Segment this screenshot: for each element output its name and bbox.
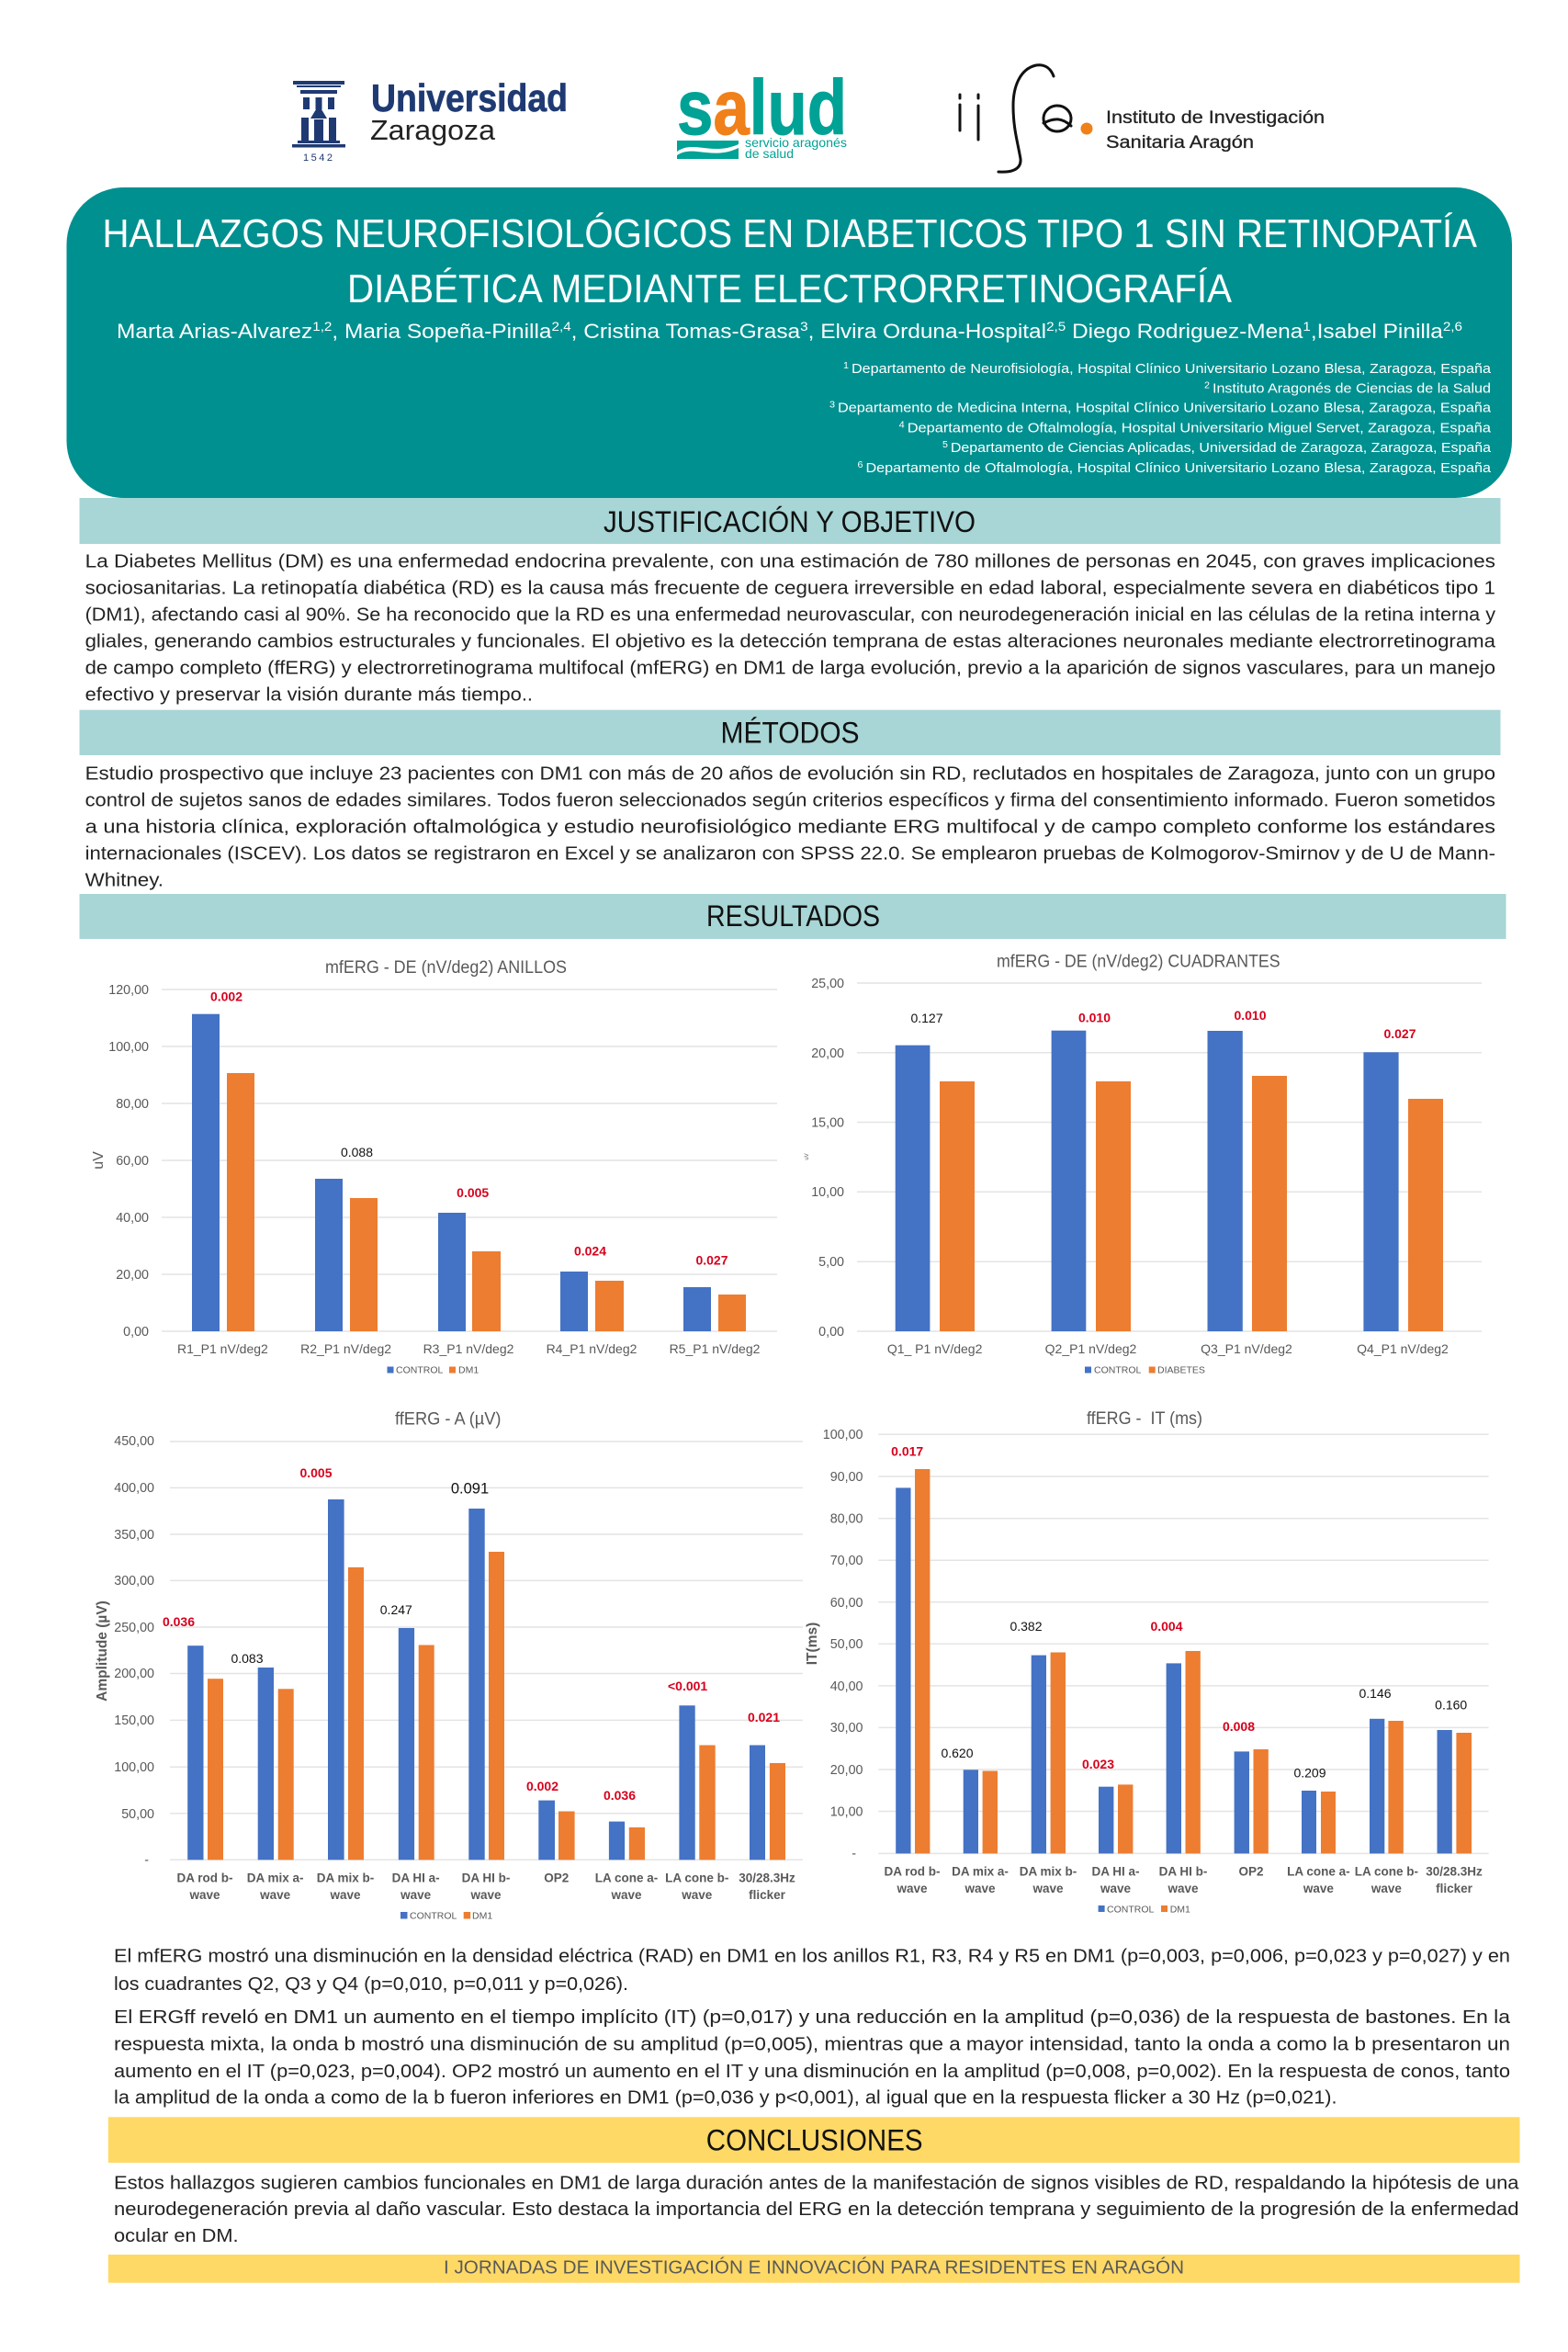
logo: IISA <box>960 65 1325 172</box>
y axis labels: - <box>852 1847 856 1861</box>
category labels: DA HI a- <box>392 1871 440 1884</box>
affiliations: 5 <box>942 440 951 450</box>
p values: 0.023 <box>1082 1757 1114 1771</box>
category labels: R4_P1 nV/deg2 <box>547 1341 637 1356</box>
bars <box>192 1014 746 1331</box>
text block: internacionales (ISCEV). Los datos se registraron en Excel y se analizaron con SPSS 22.0. Se emplearon pruebas de Kolmogorov-Smirnov y de U de Mann- <box>85 843 1495 865</box>
text block: control de sujetos sanos de edades similares. Todos fueron seleccionados según criterios específicos y firma del consentimiento informado. Fueron sometidos <box>85 790 1495 811</box>
text block: Whitney. <box>85 870 164 891</box>
y axis labels: 100,00 <box>108 1040 149 1055</box>
p values: 0.091 <box>451 1481 489 1498</box>
affiliations: 6 <box>858 460 865 470</box>
p values: <0.001 <box>668 1679 707 1693</box>
bar chart: mfERG anillos <box>91 958 777 1376</box>
p values: 0.002 <box>210 989 243 1003</box>
y axis labels: 20,00 <box>116 1268 149 1283</box>
legend: CONTROL <box>1094 1365 1141 1376</box>
text block: La Diabetes Mellitus (DM) es una enfermedad endocrina prevalente, con una estimación de 780 millones de personas en 2045, con graves implicaciones <box>85 551 1495 572</box>
footer band <box>108 2255 1519 2283</box>
text block: resultados ffERG <box>114 2007 1511 2109</box>
y axis labels: 0,00 <box>818 1325 844 1340</box>
p values <box>891 1444 1467 1781</box>
y axis labels <box>823 1428 863 1861</box>
category labels: LA cone a- <box>1287 1865 1350 1878</box>
category labels: 30/28.3Hz <box>1426 1865 1483 1878</box>
p values: 0.004 <box>1150 1619 1183 1634</box>
category labels: DA HI b- <box>1159 1865 1207 1878</box>
chart title: mfERG - DE (nV/deg2) CUADRANTES <box>997 953 1280 972</box>
affiliations: Departamento de Oftalmología, Hospital Clínico Universitario Lozano Blesa, Zaragoza, España <box>865 460 1492 476</box>
y axis labels: 10,00 <box>811 1185 844 1200</box>
heading: CONCLUSIONES <box>706 2124 922 2157</box>
y axis labels: - <box>144 1853 149 1868</box>
category labels: LA cone b- <box>1355 1865 1418 1878</box>
p values: 0.247 <box>380 1602 412 1617</box>
logo: Universidad de Zaragoza <box>292 76 568 164</box>
category labels: 30/28.3Hz <box>739 1871 795 1884</box>
y axis labels: 50,00 <box>830 1637 863 1652</box>
bars <box>896 1031 1443 1331</box>
category labels: DA mix a- <box>952 1865 1009 1878</box>
y axis labels: 350,00 <box>114 1528 154 1543</box>
category labels <box>177 1341 761 1356</box>
authors: Diego Rodriguez-Mena <box>1066 320 1303 343</box>
y axis labels: 300,00 <box>114 1574 154 1589</box>
category labels: OP2 <box>544 1871 569 1884</box>
p values: 0.017 <box>891 1444 923 1459</box>
bars <box>187 1499 785 1860</box>
category labels: Q2_P1 nV/deg2 <box>1045 1341 1137 1356</box>
p values: 0.021 <box>748 1710 780 1724</box>
icon: university building <box>292 81 345 147</box>
authors: 3 <box>800 319 808 334</box>
y axis labels: 10,00 <box>830 1804 863 1819</box>
category labels <box>884 1865 1483 1895</box>
authors: 2,5 <box>1046 319 1066 334</box>
text block <box>114 2172 1519 2246</box>
p values: 0.083 <box>231 1651 264 1666</box>
category labels: DA rod b- <box>884 1865 941 1878</box>
category labels: LA cone a- <box>595 1871 658 1884</box>
footer text: I JORNADAS DE INVESTIGACIÓN E INNOVACIÓN PARA RESIDENTES EN ARAGÓN <box>444 2256 1184 2278</box>
p values <box>210 989 728 1268</box>
logo subtitle: servicio aragonés <box>745 135 847 150</box>
text block: Estos hallazgos sugieren cambios funcionales en DM1 de larga duración antes de la manifestación de signos visibles de RD, respaldando la hipótesis de una <box>114 2172 1519 2193</box>
y axis labels: 30,00 <box>830 1721 863 1736</box>
p values: 0.146 <box>1359 1686 1392 1701</box>
text block: de campo completo (ffERG) y electrorretinograma multifocal (mfERG) en DM1 de larga evolución, previo a la aparición de signos vasculares, para un manejo <box>85 658 1495 679</box>
y axis labels: 200,00 <box>114 1667 154 1681</box>
text block: Estudio prospectivo que incluye 23 pacientes con DM1 con más de 20 años de evolución sin RD, reclutados en hospitales de Zaragoza, junto con un grupo <box>85 763 1495 785</box>
y axis labels: 90,00 <box>830 1470 863 1485</box>
p values: 0.620 <box>941 1746 974 1760</box>
category labels: R3_P1 nV/deg2 <box>423 1341 514 1356</box>
panel: header <box>66 187 1512 498</box>
y axis labels: 80,00 <box>116 1097 149 1112</box>
title: DIABÉTICA MEDIANTE ELECTRORRETINOGRAFÍA <box>347 266 1233 311</box>
y axis labels: 40,00 <box>830 1679 863 1694</box>
y axis labels: 50,00 <box>121 1807 154 1822</box>
y axis title: IT(ms) <box>805 1623 820 1665</box>
text block: resultados mfERG: los cuadrantes Q2, Q3 y Q4 (p=0,010, p=0,011 y p=0,026). <box>114 1973 628 1995</box>
category labels <box>887 1341 1449 1356</box>
affiliations: Departamento de Ciencias Aplicadas, Universidad de Zaragoza, Zaragoza, España <box>951 440 1492 456</box>
legend: CONTROL <box>1107 1904 1154 1915</box>
affiliations: Instituto Aragonés de Ciencias de la Salud <box>1213 380 1491 396</box>
logo: salud <box>677 64 847 161</box>
authors: 2,6 <box>1443 319 1462 334</box>
category labels: wave <box>610 1888 642 1902</box>
text block <box>85 763 1495 891</box>
text block: sociosanitarias. La retinopatía diabética (RD) es la causa más frecuente de ceguera irreversible en edad laboral, especialmente severa en diabéticos tipo 1 <box>85 577 1495 598</box>
y axis labels: 100,00 <box>114 1760 154 1775</box>
text block <box>85 551 1496 705</box>
category labels: DA rod b- <box>176 1871 233 1884</box>
text block: efectivo y preservar la visión durante más tiempo.. <box>85 684 533 705</box>
category labels: wave <box>1100 1882 1132 1895</box>
y axis labels: 25,00 <box>811 977 844 991</box>
authors: 1 <box>1303 319 1311 334</box>
y axis labels: 0,00 <box>123 1325 149 1340</box>
p values <box>910 1008 1416 1041</box>
heading band <box>108 2117 1519 2163</box>
p values: 0.024 <box>574 1244 606 1259</box>
category labels: LA cone b- <box>665 1871 728 1884</box>
y axis labels: 120,00 <box>108 983 149 998</box>
p values: 0.036 <box>604 1788 636 1803</box>
heading: RESULTADOS <box>706 899 880 933</box>
category labels: wave <box>681 1888 713 1902</box>
chart title: ffERG - A (µV) <box>395 1409 502 1430</box>
p values: 0.088 <box>341 1145 373 1159</box>
logo year: 1542 <box>303 153 333 164</box>
category labels: wave <box>1167 1882 1199 1895</box>
bars <box>896 1469 1472 1853</box>
authors: , Cristina Tomas-Grasa <box>571 320 801 343</box>
logo subtitle: de salud <box>745 146 794 161</box>
logo text <box>1106 107 1325 153</box>
legend <box>1085 1365 1205 1376</box>
y axis labels: 60,00 <box>830 1596 863 1611</box>
affiliations: Departamento de Neurofisiología, Hospital Clínico Universitario Lozano Blesa, Zaragoza, España <box>852 361 1492 377</box>
legend: DM1 <box>458 1365 479 1376</box>
logo wordmark salud: salud <box>677 64 847 151</box>
category labels: wave <box>259 1888 291 1902</box>
category labels: wave <box>1032 1882 1064 1895</box>
y axis labels: 450,00 <box>114 1434 154 1449</box>
text block: ocular en DM. <box>114 2225 239 2246</box>
p values: 0.027 <box>695 1253 728 1268</box>
y axis labels: 15,00 <box>811 1115 844 1130</box>
y axis labels: 20,00 <box>830 1763 863 1778</box>
legend: CONTROL <box>396 1365 443 1376</box>
title <box>103 211 1478 311</box>
heading band <box>79 498 1501 544</box>
icon: salud band <box>677 141 739 159</box>
legend <box>1099 1904 1190 1915</box>
category labels: flicker <box>749 1888 786 1902</box>
category labels: DA mix b- <box>1020 1865 1077 1878</box>
y axis labels: 250,00 <box>114 1621 154 1635</box>
category labels: wave <box>329 1888 361 1902</box>
category labels: R1_P1 nV/deg2 <box>177 1341 268 1356</box>
title: HALLAZGOS NEUROFISIOLÓGICOS EN DIABETICOS TIPO 1 SIN RETINOPATÍA <box>103 211 1478 256</box>
y axis labels <box>114 1434 154 1868</box>
text block: resultados ffERG: respuesta mixta, la onda b mostró una disminución de su amplitud (p=0,005), mientras que a mayor intensidad, tanto la onda a como la b presentaron un <box>114 2034 1510 2055</box>
y axis labels: 100,00 <box>823 1428 863 1442</box>
text block: neurodegeneración previa al daño vascular. Esto destaca la importancia del ERG en la detección temprana y seguimiento de la progresión de la enfermedad <box>114 2199 1519 2220</box>
category labels: DA HI b- <box>462 1871 510 1884</box>
bar chart: ffERG tiempo implícito <box>805 1409 1489 1915</box>
category labels: Q3_P1 nV/deg2 <box>1201 1341 1292 1356</box>
authors: ,Isabel Pinilla <box>1311 320 1443 343</box>
p values: 0.382 <box>1010 1619 1043 1634</box>
heading band <box>79 710 1501 755</box>
y axis labels: 20,00 <box>811 1046 844 1061</box>
legend: DM1 <box>1170 1904 1190 1915</box>
authors: 1,2 <box>312 319 333 334</box>
authors: , Elvira Orduna-Hospital <box>808 320 1046 343</box>
affiliations: 4 <box>899 421 908 431</box>
section heading: resultados <box>79 894 1506 939</box>
icon: iisa symbol <box>960 65 1071 172</box>
icon: orange dot <box>1080 123 1093 134</box>
p values: 0.127 <box>910 1011 943 1025</box>
category labels: R2_P1 nV/deg2 <box>300 1341 391 1356</box>
category labels: wave <box>1371 1882 1402 1895</box>
logo text: Sanitaria Aragón <box>1106 132 1254 153</box>
affiliations: 1 <box>843 361 852 371</box>
category labels: wave <box>896 1882 928 1895</box>
p values: 0.209 <box>1293 1766 1326 1781</box>
category labels: OP2 <box>1238 1865 1264 1878</box>
p values: 0.027 <box>1383 1026 1416 1041</box>
y axis labels: 80,00 <box>830 1512 863 1527</box>
y axis labels: 400,00 <box>114 1481 154 1496</box>
category labels: DA HI a- <box>1091 1865 1140 1878</box>
y axis labels <box>108 983 149 1340</box>
category labels: wave <box>964 1882 996 1895</box>
y axis title: uV <box>805 1153 810 1160</box>
category labels: DA mix a- <box>247 1871 303 1884</box>
footer background <box>108 2255 1519 2283</box>
affiliations: 3 <box>829 401 838 411</box>
logo wordmark Zaragoza: Zaragoza <box>370 114 496 146</box>
category labels: wave <box>400 1888 432 1902</box>
text block: resultados mfERG: El mfERG mostró una disminución en la densidad eléctrica (RAD) en DM1 en los anillos R1, R3, R4 y R5 en DM1 (p=0,003, p=0,006, p=0,023 y p=0,027) y en <box>114 1946 1510 1967</box>
legend: DM1 <box>472 1911 492 1922</box>
bar chart: ffERG amplitud <box>95 1409 803 1922</box>
chart title: mfERG - DE (nV/deg2) ANILLOS <box>325 958 567 978</box>
heading: JUSTIFICACIÓN Y OBJETIVO <box>604 505 976 538</box>
category labels: wave <box>188 1888 220 1902</box>
y axis labels: 60,00 <box>116 1154 149 1169</box>
category labels: Q4_P1 nV/deg2 <box>1357 1341 1449 1356</box>
category labels: Q1_ P1 nV/deg2 <box>887 1341 983 1356</box>
y axis labels: 40,00 <box>116 1211 149 1226</box>
section: justificación y objetivo <box>79 498 1501 705</box>
text block: resultados ffERG: El ERGff reveló en DM1 un aumento en el tiempo implícito (IT) (p=0,017) y una reducción en la amplitud (p=0,036) de la respuesta de bastones. En la <box>114 2007 1511 2028</box>
p values: 0.010 <box>1078 1011 1111 1025</box>
legend: DIABETES <box>1157 1365 1205 1376</box>
p values: 0.160 <box>1435 1698 1467 1713</box>
y axis labels: 150,00 <box>114 1713 154 1728</box>
affiliations: Departamento de Medicina Interna, Hospital Clínico Universitario Lozano Blesa, Zaragoza, España <box>838 401 1492 416</box>
y axis labels: 5,00 <box>818 1255 844 1270</box>
chart title: ffERG - IT (ms) <box>1087 1409 1202 1429</box>
heading band <box>79 894 1506 939</box>
p values: 0.002 <box>526 1779 558 1793</box>
section: conclusiones <box>108 2117 1519 2246</box>
y axis labels <box>811 977 844 1340</box>
bar chart: mfERG cuadrantes <box>805 953 1482 1376</box>
legend <box>400 1911 492 1922</box>
heading: MÉTODOS <box>720 717 860 750</box>
p values: 0.005 <box>299 1465 333 1480</box>
text block: resultados ffERG: la amplitud de la onda a como de la b fueron inferiores en DM1 (p=0,036 y p<0,001), al igual que en la respuesta flicker a 30 Hz (p=0,021). <box>114 2087 1337 2109</box>
y axis title: uV <box>91 1151 107 1170</box>
category labels: flicker <box>1436 1882 1473 1895</box>
category labels: wave <box>469 1888 502 1902</box>
category labels: DA mix b- <box>317 1871 374 1884</box>
authors: Marta Arias-Alvarez <box>117 320 297 343</box>
p values: 0.005 <box>457 1185 489 1200</box>
affiliations: Departamento de Oftalmología, Hospital Universitario Miguel Servet, Zaragoza, España <box>908 421 1492 436</box>
category labels <box>176 1871 795 1902</box>
legend <box>388 1365 479 1376</box>
text block: resultados ffERG: aumento en el IT (p=0,023, p=0,004). OP2 mostró un aumento en el IT y una disminución en la amplitud (p=0,008, p=0,002). En la respuesta de conos, tanto <box>114 2061 1510 2082</box>
header background <box>66 187 1512 498</box>
affiliations <box>829 361 1492 476</box>
p values: 0.010 <box>1234 1008 1267 1023</box>
logo wordmark Universidad: Universidad <box>371 76 568 119</box>
y axis labels: 70,00 <box>830 1554 863 1568</box>
p values <box>163 1465 780 1803</box>
text block: (DM1), afectando casi al 90%. Se ha reconocido que la RD es una enfermedad neurovascular, con neurodegeneración inicial en las células de la retina interna y <box>85 605 1496 626</box>
text block: resultados mfERG <box>114 1946 1510 1995</box>
authors: , Maria Sopeña-Pinilla <box>332 320 552 343</box>
authors: 2,4 <box>552 319 571 334</box>
logo text: Instituto de Investigación <box>1106 107 1325 128</box>
legend: CONTROL <box>410 1911 457 1922</box>
text block: gliales, generando cambios estructurales y funcionales. El objetivo es la detección temprana de estas alteraciones neuronales mediante electrorretinograma <box>85 630 1496 651</box>
category labels: wave <box>1303 1882 1334 1895</box>
y axis title: Amplitude (µV) <box>95 1600 110 1702</box>
section: métodos <box>79 710 1501 891</box>
text block: a una historia clínica, exploración oftalmológica y estudio neurofisiológico mediante ERG multifocal y de campo completo conforme los estándares <box>85 817 1495 838</box>
logo subtitle <box>745 135 847 161</box>
affiliations: 2 <box>1204 380 1213 390</box>
p values: 0.008 <box>1223 1719 1255 1734</box>
category labels: R5_P1 nV/deg2 <box>670 1341 761 1356</box>
p values: 0.036 <box>163 1614 195 1629</box>
